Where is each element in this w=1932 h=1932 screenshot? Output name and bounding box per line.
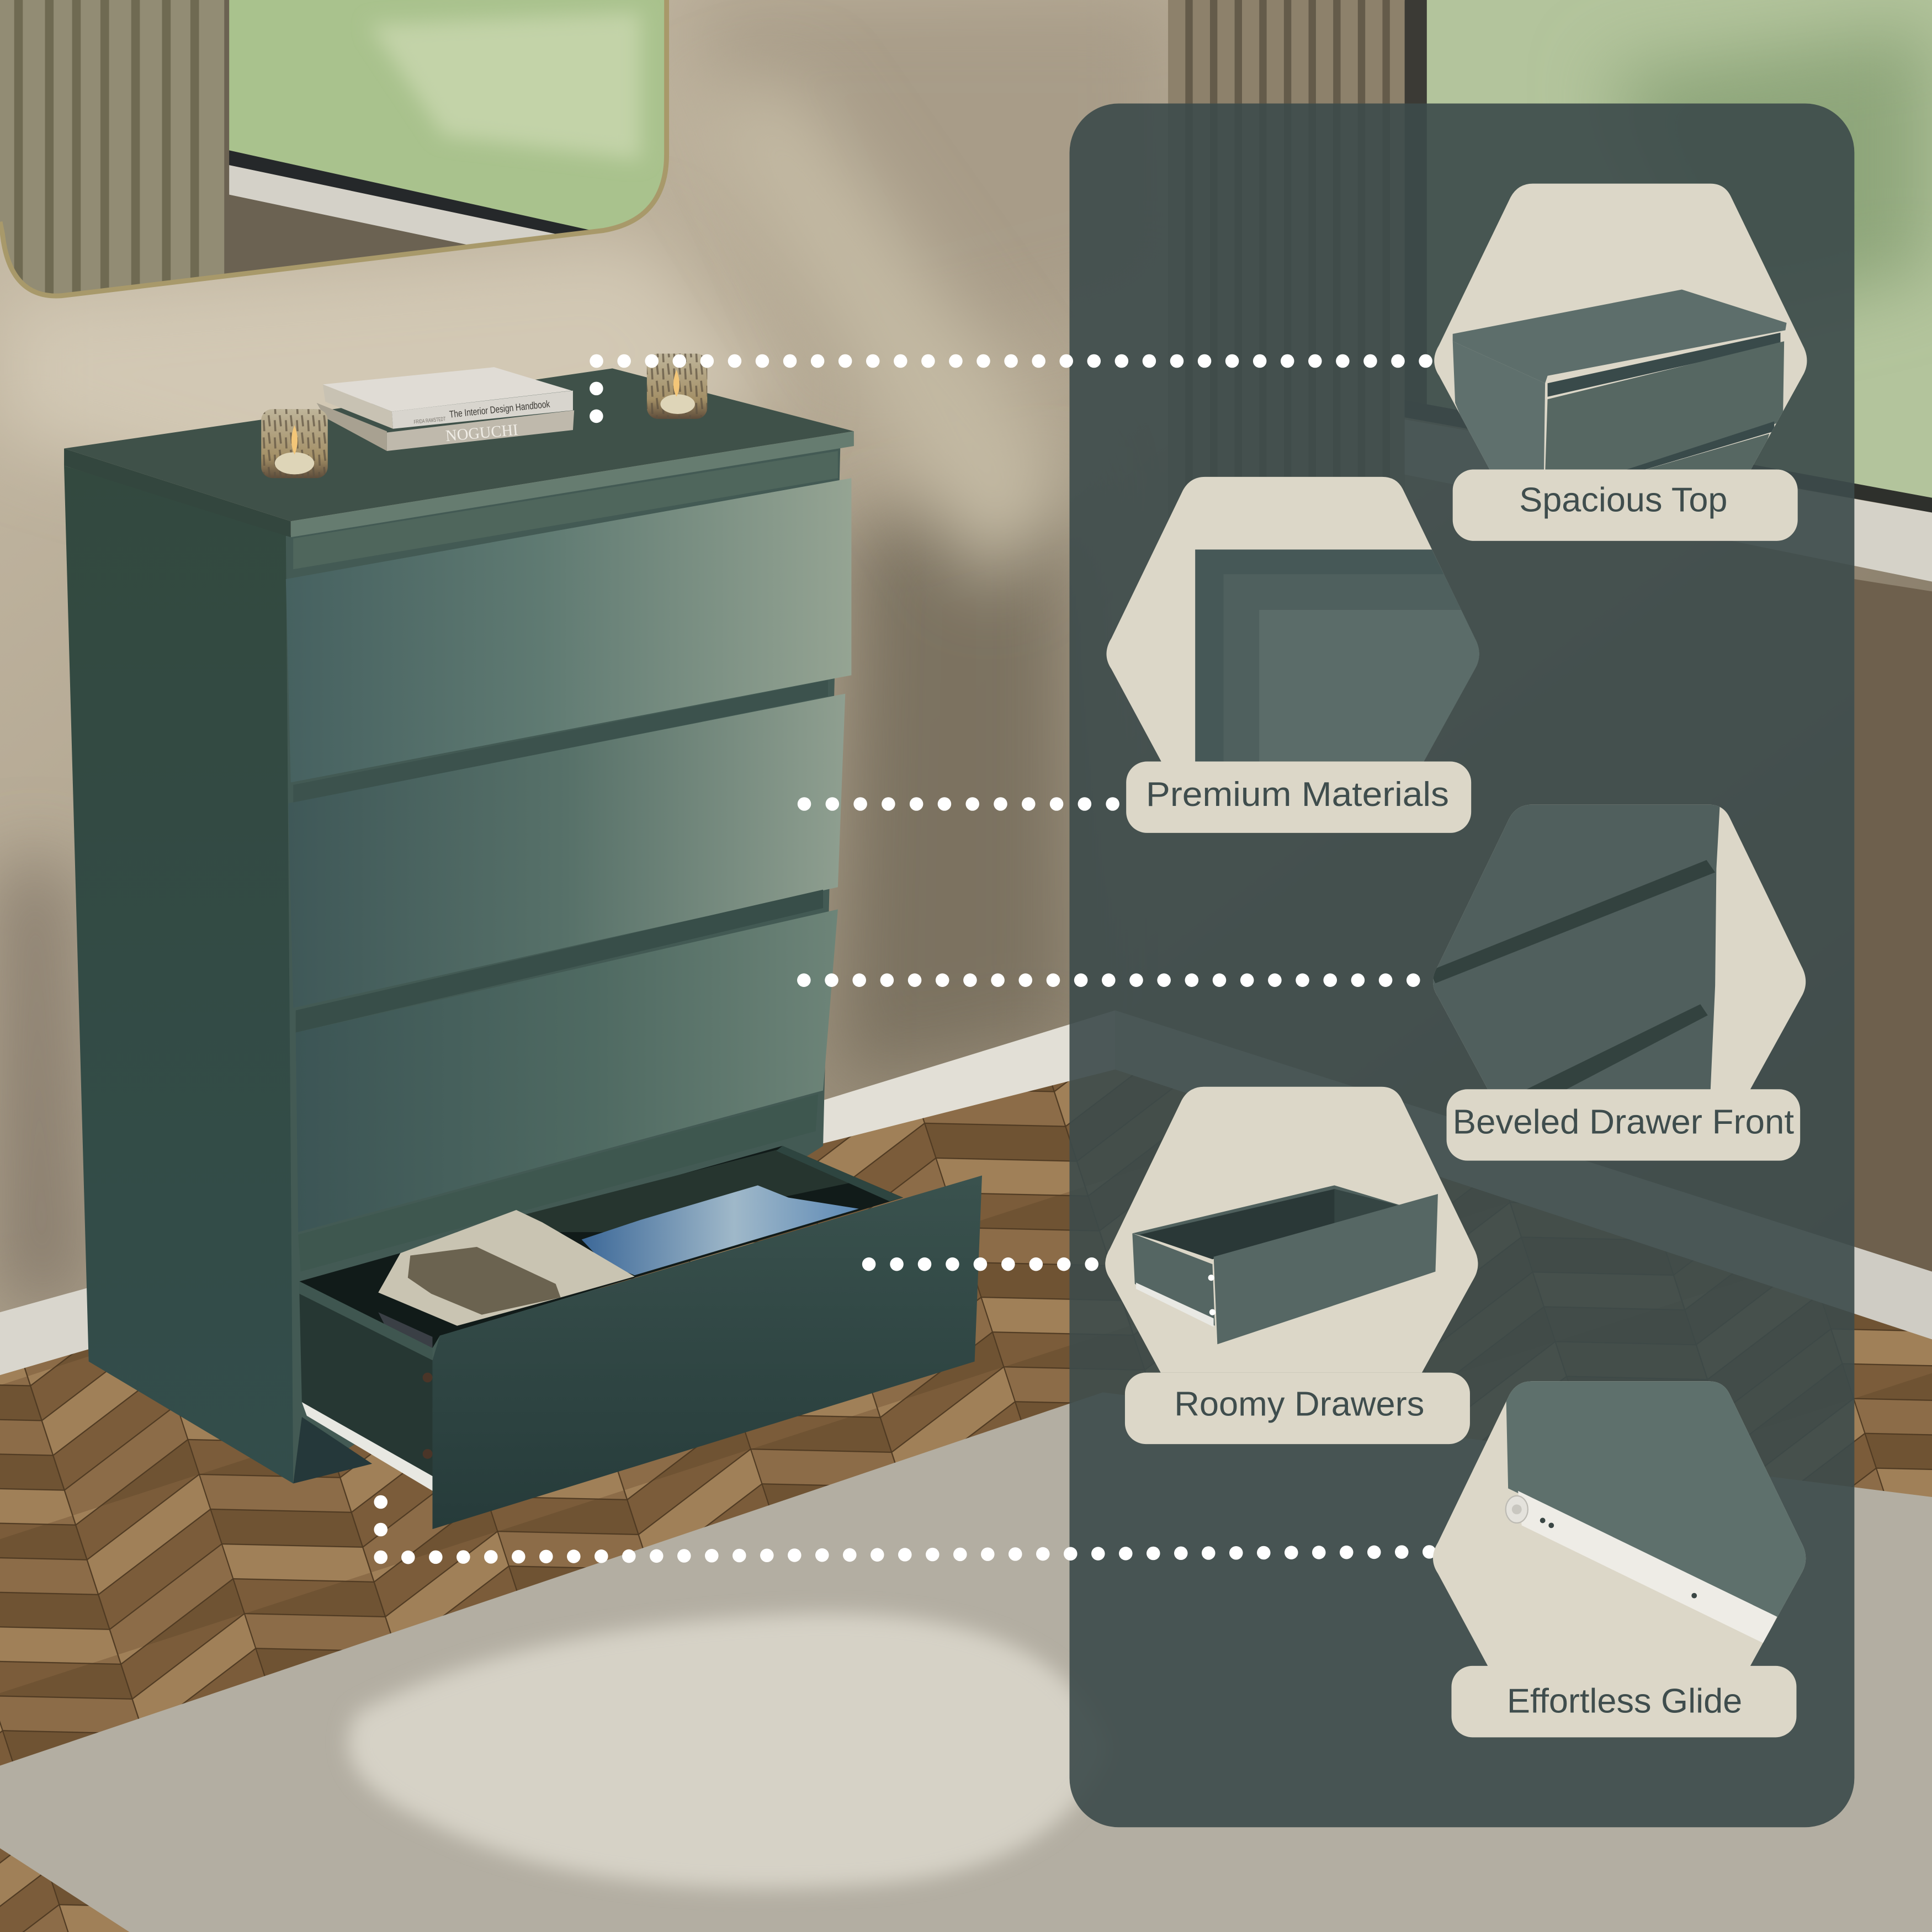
strip below drawer 1 — [293, 680, 828, 803]
upper book title: The Interior Design Handbook — [449, 399, 550, 420]
label pill — [1451, 1666, 1796, 1737]
baseboard right — [1115, 1010, 1932, 1339]
mirror — [0, 0, 667, 302]
folded olive sweater — [408, 1247, 561, 1315]
curtain right — [1168, 0, 1405, 518]
wall — [0, 0, 1932, 1479]
callout: beveled drawer front — [1417, 801, 1806, 1161]
drawer close-up — [1132, 1185, 1438, 1344]
dresser carcass front — [286, 446, 840, 1484]
strip below drawer 2 — [296, 890, 823, 1033]
hexagon base — [1434, 184, 1807, 469]
label text: Premium Materials — [1146, 775, 1449, 814]
dotted connector: roomy drawers — [869, 1261, 1092, 1267]
strip under top — [293, 451, 838, 569]
drawer inner right rim — [776, 1146, 903, 1201]
layered panels close-up — [1195, 550, 1495, 771]
lower book title: NOGUCHI — [445, 421, 519, 445]
label pill — [1447, 1089, 1800, 1161]
label pill — [1125, 1373, 1470, 1444]
dotted connector: effortless glide — [381, 1475, 1429, 1557]
label text: Beveled Drawer Front — [1453, 1103, 1794, 1142]
drawer 1 — [286, 478, 851, 782]
lower book side — [317, 403, 387, 451]
candle right — [647, 354, 707, 419]
upper book spine — [392, 391, 573, 429]
callout: roomy drawers — [1105, 1087, 1478, 1444]
drawer 3 — [296, 909, 838, 1232]
drawer side — [299, 1294, 432, 1491]
top front edge — [291, 431, 854, 537]
jeans — [582, 1185, 859, 1275]
callout: premium materials — [1106, 477, 1495, 833]
label text: Roomy Drawers — [1174, 1385, 1424, 1424]
dotted connector: beveled drawer front — [776, 977, 1413, 983]
label pill — [1126, 761, 1471, 833]
callout: effortless glide — [1433, 1378, 1817, 1737]
drawer 2 — [288, 694, 845, 1008]
dotted connector: spacious top — [596, 361, 1426, 419]
screws — [423, 1373, 432, 1459]
dresser top close-up — [1453, 290, 1787, 474]
floor — [0, 1060, 1932, 1932]
book stack — [317, 367, 574, 451]
mirror frame — [0, 0, 667, 296]
dotted connector: premium materials — [776, 801, 1113, 807]
right window — [1374, 0, 1932, 582]
upper book author: FRIDA RAMSTEDT — [413, 416, 446, 426]
hexagon base — [1105, 1087, 1478, 1373]
mirror curtain — [0, 0, 224, 302]
top surface — [64, 368, 854, 521]
label text: Spacious Top — [1519, 480, 1727, 519]
upper book top — [323, 367, 572, 412]
candle left — [261, 409, 328, 478]
back interior lighter — [456, 1148, 850, 1232]
label pill — [1453, 469, 1798, 541]
mirror window — [229, 0, 667, 234]
drawer slide close-up — [1506, 1378, 1817, 1651]
hexagon base — [1433, 1381, 1806, 1667]
top left edge — [64, 448, 291, 537]
baseboard middle — [823, 1010, 1115, 1143]
rug light patch — [348, 1613, 1109, 1888]
hexagon base — [1433, 805, 1806, 1090]
baseboard left — [0, 1288, 89, 1375]
panel: features background — [1070, 104, 1854, 1827]
drawer left rim — [299, 1281, 432, 1360]
drawer opening interior — [299, 1146, 903, 1348]
beveled fronts close-up — [1417, 801, 1720, 1097]
open drawer front — [432, 1175, 982, 1529]
dresser side — [64, 466, 293, 1484]
callout: spacious top — [1434, 184, 1807, 541]
lower book spine — [387, 410, 574, 451]
wall light and shadow — [0, 0, 1932, 1306]
under drawer shadow — [293, 1417, 372, 1484]
label text: Effortless Glide — [1507, 1682, 1742, 1721]
hexagon base — [1106, 477, 1479, 763]
rug — [0, 1392, 1932, 1932]
dark garment — [378, 1312, 432, 1348]
folded cream shirt — [378, 1210, 635, 1326]
upper book pages — [323, 384, 393, 429]
metal slide rail — [302, 1402, 432, 1491]
dresser — [64, 368, 982, 1529]
carcass strip under drawer 3 — [298, 1094, 818, 1272]
